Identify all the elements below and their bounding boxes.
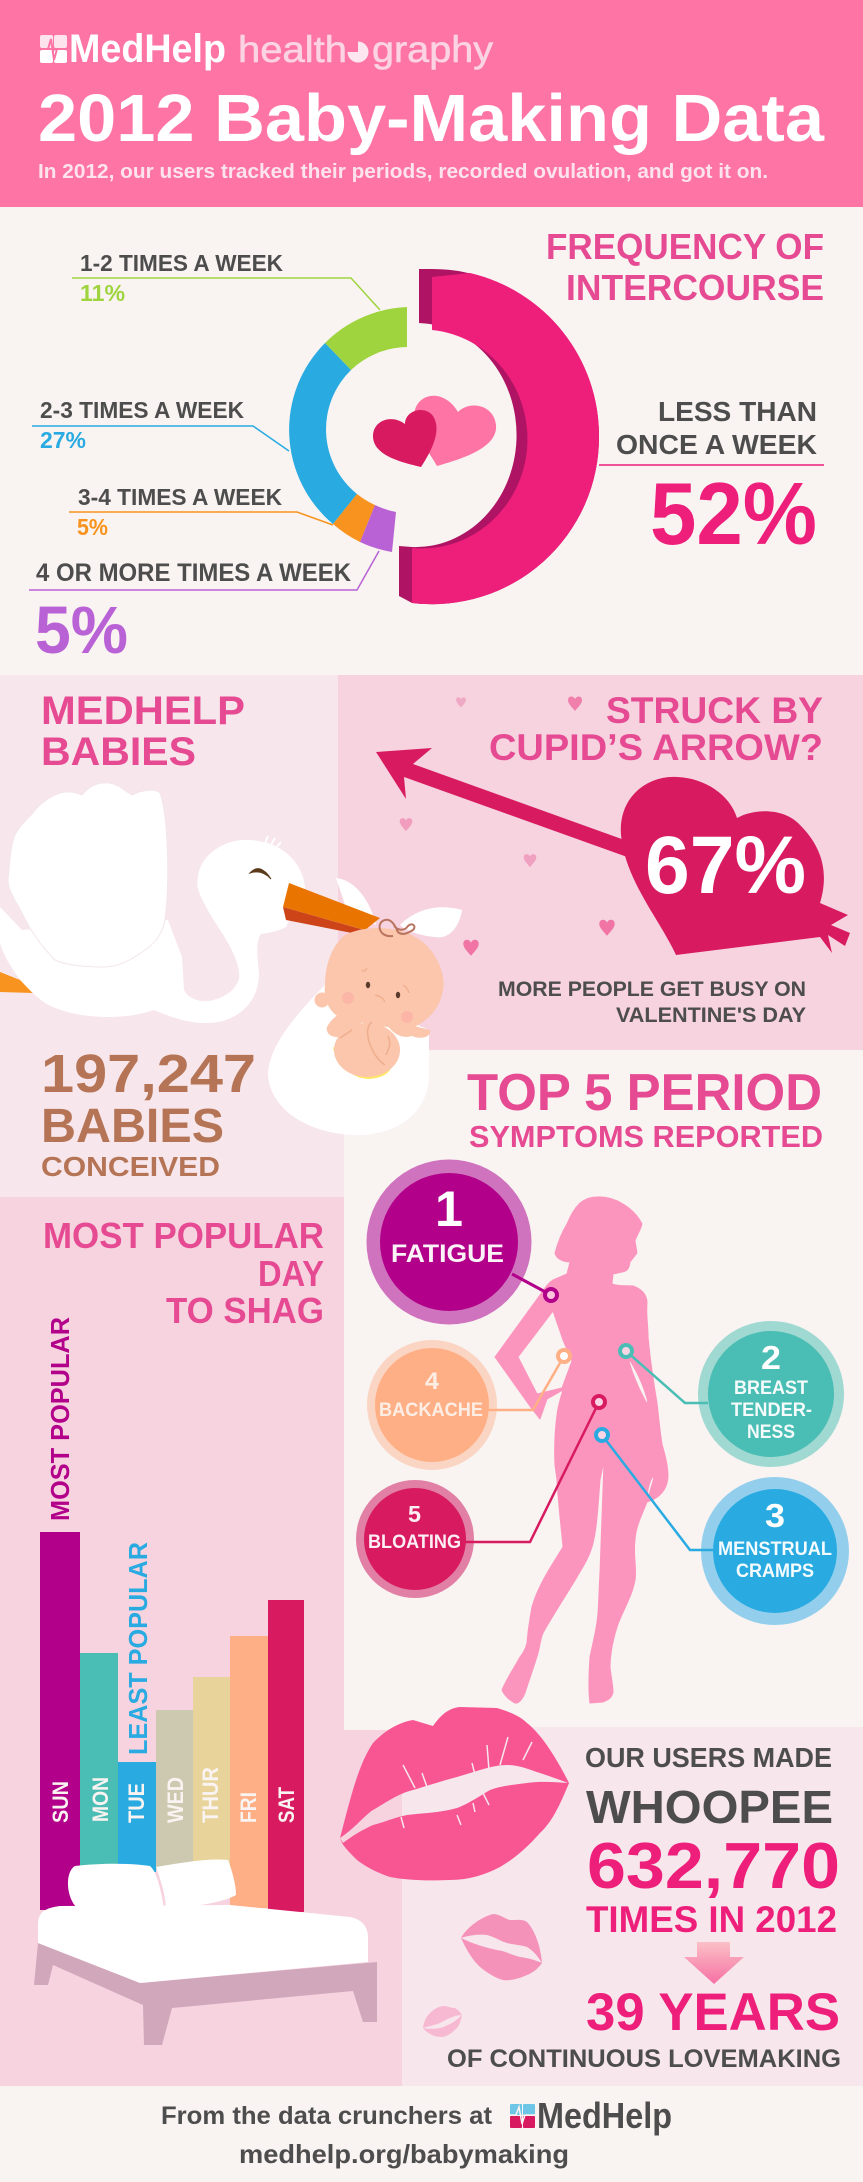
bar chart: SUN <box>48 1781 73 1823</box>
symptom 2: breast tenderness: 2 <box>761 1339 781 1376</box>
donut chart <box>289 269 599 604</box>
logo wordmark: MedHelp <box>537 2095 672 2136</box>
panel: footer <box>0 2086 863 2182</box>
bar chart: FRI <box>236 1792 261 1823</box>
bar chart: SAT <box>274 1787 299 1823</box>
bar chart: TUE <box>124 1783 149 1823</box>
label: less than once a week: LESS THAN <box>658 396 817 427</box>
panel: header <box>0 0 863 207</box>
woman silhouette <box>495 1197 668 1703</box>
heading: MEDHELP <box>41 689 245 733</box>
label: less than once a week <box>599 396 824 563</box>
caption: VALENTINE'S DAY <box>616 1004 806 1027</box>
label: 3-4 times a week: 5% <box>77 514 108 540</box>
title: 2012 Baby-Making Data <box>38 81 825 156</box>
stats text: 632,770 <box>587 1829 840 1902</box>
heading <box>489 690 823 768</box>
symptom 3: menstrual cramps <box>596 1429 849 1625</box>
icon: medium lips <box>461 1914 542 1980</box>
label: 2-3 times a week <box>32 397 289 453</box>
stats text: TIMES IN 2012 <box>586 1899 837 1940</box>
subtitle: In 2012, our users tracked their periods, recorded ovulation, and got it on. <box>38 161 768 183</box>
icon: bed <box>34 1859 377 2045</box>
stats text: 39 YEARS <box>586 1983 840 2042</box>
stork body and neck <box>0 840 305 1023</box>
symptom 5: bloating: BLOATING <box>368 1532 461 1553</box>
panel: medhelp babies <box>0 675 344 1197</box>
stork wing <box>8 783 168 967</box>
heading <box>546 226 824 308</box>
icon: two hearts <box>373 396 496 467</box>
healthography wordmark: graphy <box>372 29 494 70</box>
stats text: OUR USERS MADE <box>585 1742 832 1773</box>
heading: CUPID’S ARROW? <box>489 727 823 768</box>
icon: large lips <box>340 1707 569 1880</box>
stats text: OF CONTINUOUS LOVEMAKING <box>447 2045 841 2073</box>
bundle sack <box>268 985 429 1135</box>
icon: MedHelp logo mark <box>40 35 67 63</box>
url: medhelp.org/babymaking <box>239 2139 569 2169</box>
label: 4 or more times a week: 5% <box>35 593 128 668</box>
stats text <box>447 1742 841 2073</box>
caption <box>498 978 806 1027</box>
label: 3-4 times a week: 3-4 TIMES A WEEK <box>78 484 282 510</box>
label: 4 or more times a week: 4 OR MORE TIMES A WEEK <box>36 559 351 587</box>
heading: TOP 5 PERIOD <box>467 1064 822 1122</box>
heading: FREQUENCY OF <box>546 226 824 267</box>
symptom 4: backache <box>367 1340 570 1470</box>
heading: MOST POPULAR <box>43 1215 324 1256</box>
symptom 2: breast tenderness: NESS <box>747 1422 795 1443</box>
label: less than once a week: ONCE A WEEK <box>616 429 817 460</box>
stat: babies conceived: BABIES <box>41 1100 224 1153</box>
symptom 4: backache: 4 <box>425 1368 440 1395</box>
bar chart: THUR <box>198 1767 223 1823</box>
bundle knot ears <box>336 878 462 937</box>
stat: babies conceived: CONCEIVED <box>41 1151 220 1182</box>
symptom 1: fatigue <box>366 1160 557 1324</box>
caption: MORE PEOPLE GET BUSY ON <box>498 978 806 1001</box>
label: 2-3 times a week: 27% <box>40 427 86 453</box>
label: 2-3 times a week: 2-3 TIMES A WEEK <box>40 397 244 423</box>
label: less than once a week: 52% <box>650 464 817 563</box>
icon: small lips <box>423 2006 462 2037</box>
heading: SYMPTOMS REPORTED <box>469 1119 823 1154</box>
bar chart <box>40 1532 304 1912</box>
baby <box>314 920 444 1079</box>
stats text: WHOOPEE <box>586 1781 833 1833</box>
label: least popular: LEAST POPULAR <box>123 1542 153 1755</box>
panel: whoopee <box>402 1727 863 2086</box>
stat: 67%: 67% <box>645 820 806 911</box>
heading <box>43 1215 324 1331</box>
label: 1-2 times a week <box>72 250 380 310</box>
healthography wordmark <box>238 29 494 70</box>
panel: cupid's arrow <box>338 675 863 1050</box>
stork tail <box>0 972 33 993</box>
logo wordmark: MedHelp <box>69 27 226 71</box>
label: 3-4 times a week <box>69 484 333 540</box>
stat: babies conceived <box>41 1044 256 1182</box>
panel: frequency of intercourse <box>0 207 863 675</box>
label: most popular: MOST POPULAR <box>45 1317 75 1521</box>
heading: DAY <box>258 1253 324 1294</box>
heart with arrow tail <box>621 777 850 955</box>
symptom 3: menstrual cramps: 3 <box>765 1497 785 1534</box>
symptom 2: breast tenderness: BREAST <box>734 1378 808 1399</box>
symptom 2: breast tenderness: TENDER- <box>731 1400 812 1421</box>
stork eye <box>250 869 271 879</box>
healthography wordmark: health <box>238 29 347 70</box>
symptom 3: menstrual cramps: CRAMPS <box>736 1561 814 1582</box>
heading: TO SHAG <box>166 1290 324 1331</box>
label: 4 or more times a week <box>29 551 379 668</box>
symptom 5: bloating <box>356 1396 605 1598</box>
bar chart: MON <box>88 1777 113 1822</box>
highlight slivers <box>630 1362 653 1495</box>
symptom 5: bloating: 5 <box>408 1501 421 1527</box>
label: 1-2 times a week: 1-2 TIMES A WEEK <box>80 250 283 276</box>
heading <box>41 689 245 774</box>
label: 1-2 times a week: 11% <box>80 280 125 306</box>
symptom 1: fatigue: FATIGUE <box>391 1240 504 1268</box>
symptom 2: breast tenderness <box>620 1321 844 1467</box>
stat: babies conceived: 197,247 <box>41 1044 256 1104</box>
heading: BABIES <box>41 730 196 774</box>
illustration: stork carrying baby <box>0 783 462 1135</box>
icon: MedHelp logo mark <box>510 2104 535 2128</box>
heading: INTERCOURSE <box>566 267 824 308</box>
small hearts <box>400 696 615 956</box>
heading <box>467 1064 823 1154</box>
bar chart: WED <box>163 1777 188 1823</box>
symptom 1: fatigue: 1 <box>435 1181 463 1237</box>
symptom 4: backache: BACKACHE <box>379 1400 483 1421</box>
panel: top 5 period symptoms <box>344 1050 863 1730</box>
heading: STRUCK BY <box>606 690 823 731</box>
stork head crest <box>262 836 281 852</box>
arrow: down <box>684 1942 744 1984</box>
arrow <box>376 748 630 858</box>
symptom 3: menstrual cramps: MENSTRUAL <box>718 1539 832 1560</box>
credit line: From the data crunchers at <box>161 2102 493 2130</box>
panel: most popular day <box>0 1197 402 2086</box>
stork beak <box>283 883 380 934</box>
